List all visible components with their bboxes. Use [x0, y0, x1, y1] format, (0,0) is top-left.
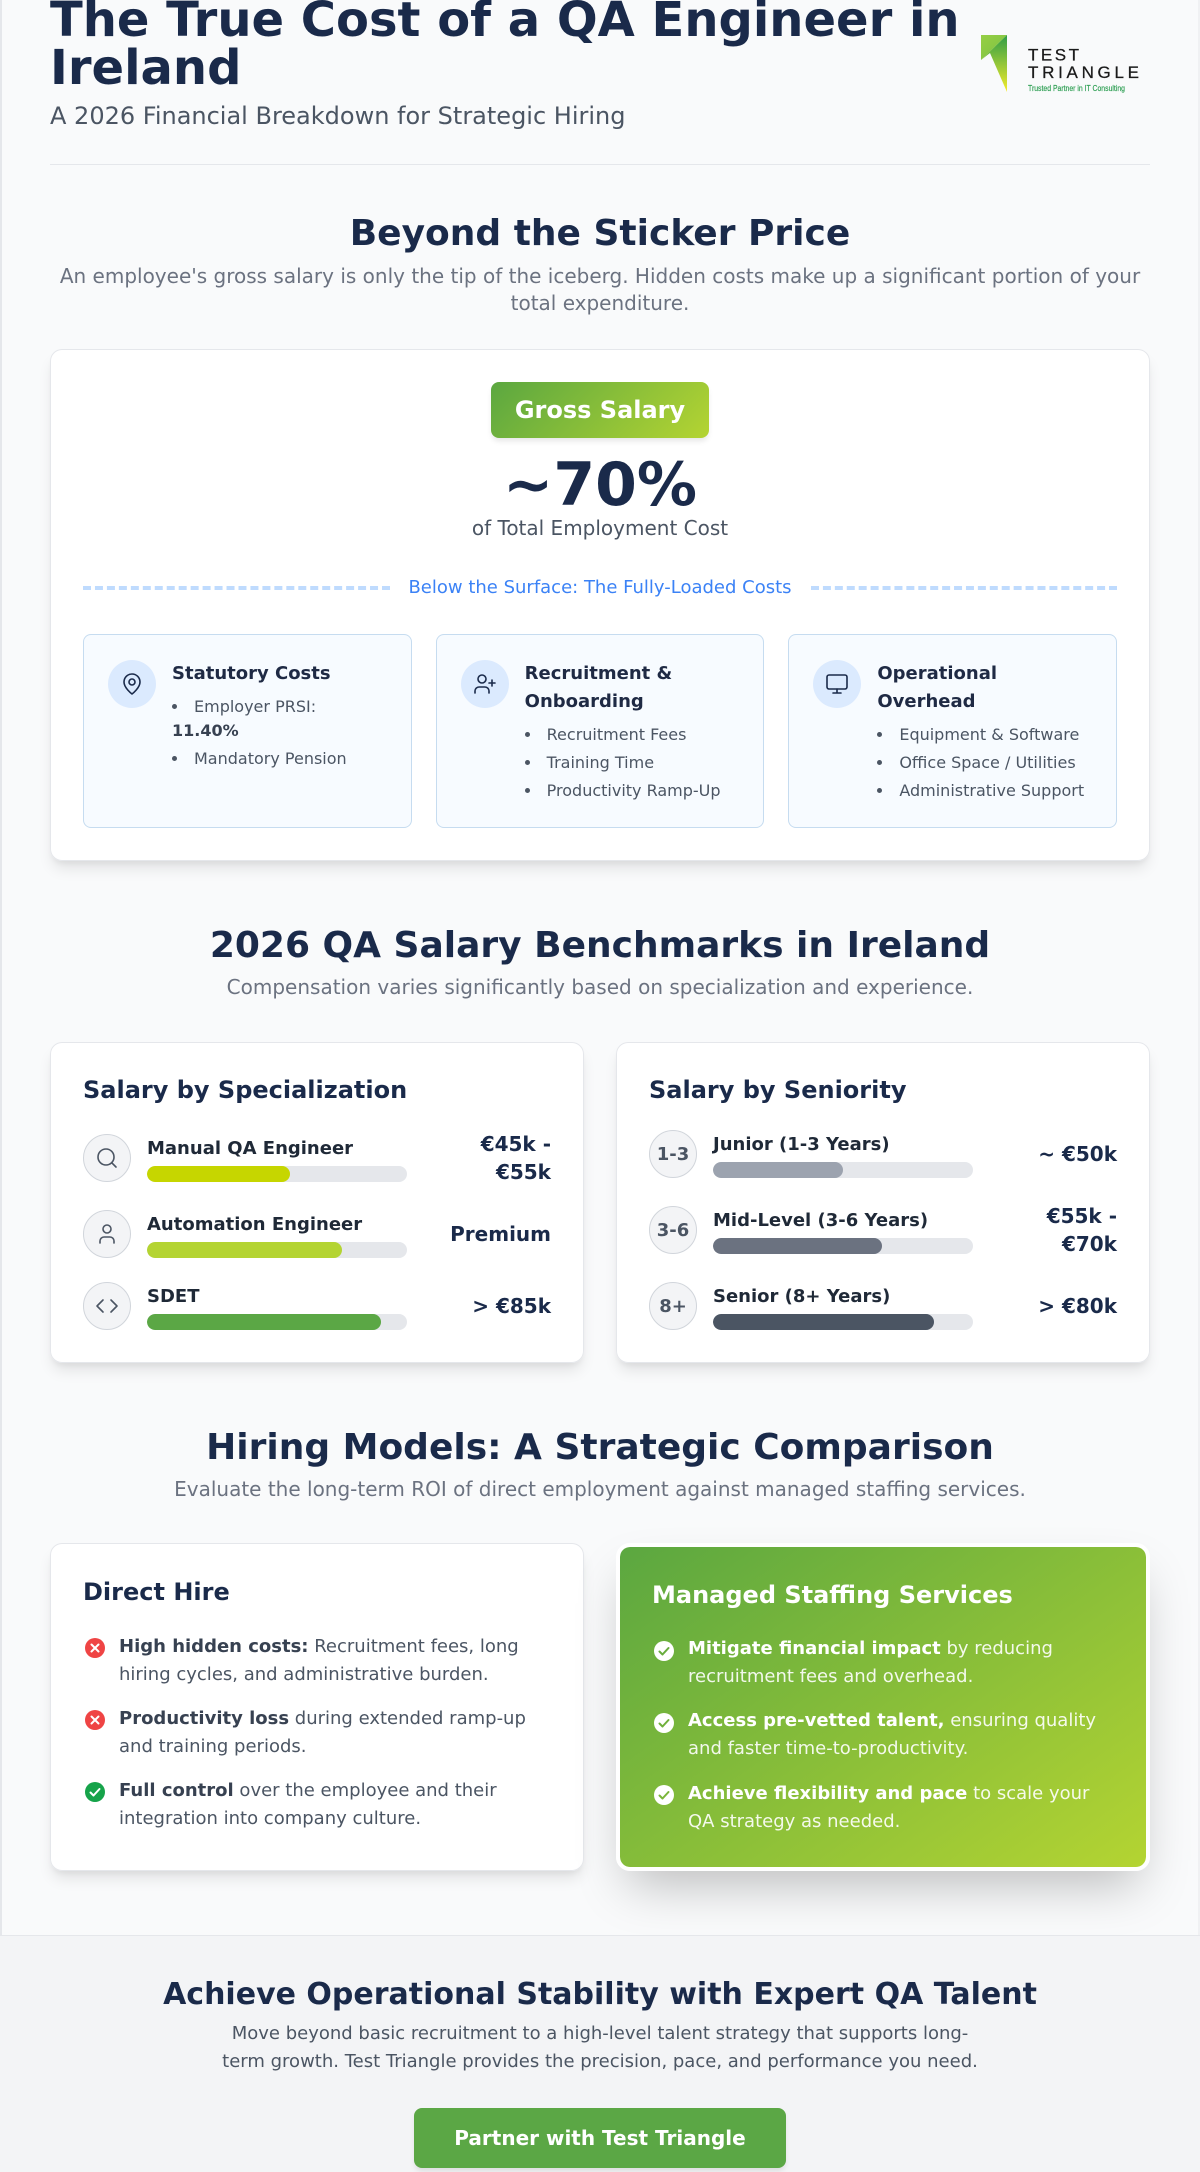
panel: direct hire: [50, 1543, 584, 1871]
label: Junior (1-3 Years): [713, 1134, 890, 1155]
section intro text: [60, 264, 1140, 315]
icon: red cross: [85, 1710, 105, 1730]
bar 65 percent: [713, 1238, 973, 1254]
value: [1046, 1204, 1118, 1256]
logo: Test Triangle: Trusted Partner in IT Consulting: [1028, 84, 1125, 93]
panel title: Salary by Specialization: [83, 1076, 407, 1104]
cost list: [877, 725, 1084, 800]
point: pre-vetted talent: Access pre-vetted talent, ensuring quality: [688, 1710, 1096, 1731]
badge: 8+: [649, 1282, 697, 1330]
point: full control: [119, 1780, 497, 1829]
container edge strips: [0, 0, 2, 2172]
cost list: Productivity Ramp-Up: [547, 781, 721, 800]
card title: [877, 663, 997, 712]
bar 85 percent: [713, 1314, 973, 1330]
point: productivity loss: Productivity loss during extended ramp-up: [119, 1708, 526, 1729]
row: automation engineer: [83, 1210, 551, 1258]
heading: hiring models: Hiring Models: A Strategic Comparison: [206, 1427, 994, 1468]
cost list: Training Time: [547, 753, 654, 772]
icon: map pin: [108, 660, 156, 708]
point: flexibility: QA strategy as needed.: [688, 1811, 900, 1832]
cost list: Employer PRSI: 11.40%: [172, 697, 316, 740]
label: SDET: [147, 1286, 199, 1307]
badge: gross salary: [491, 382, 709, 438]
logo: Test Triangle: [981, 35, 1139, 93]
point: hidden costs: High hidden costs: Recruitment fees, long: [119, 1636, 519, 1657]
row: manual QA engineer: [83, 1132, 552, 1184]
panel: salary by specialization: [50, 1042, 584, 1363]
divider label: below the surface: Below the Surface: The Fully-Loaded Costs: [408, 577, 792, 598]
panel title: Direct Hire: [83, 1578, 230, 1606]
icon: user plus: [461, 660, 509, 708]
logo: Test Triangle: TEST: [1028, 46, 1079, 64]
cost list: Office Space / Utilities: [899, 753, 1076, 772]
icon: search: [83, 1134, 131, 1182]
badge: 3-6: [649, 1206, 697, 1254]
value: Premium: [450, 1222, 551, 1246]
point: financial impact: [688, 1638, 1053, 1687]
panel: iceberg cost breakdown: [50, 349, 1150, 861]
icon: white check: [654, 1713, 674, 1733]
point: financial impact: recruitment fees and overhead.: [688, 1666, 973, 1687]
stat caption: of Total Employment Cost: [472, 516, 728, 540]
button: partner: Partner with Test Triangle: [454, 2126, 746, 2150]
panel title: Managed Staffing Services: [652, 1581, 1013, 1609]
footer text: Move beyond basic recruitment to a high-level talent strategy that supports long-: [232, 2023, 968, 2044]
label: Automation Engineer: [147, 1214, 362, 1235]
label: Mid-Level (3-6 Years): [713, 1210, 928, 1231]
label: Manual QA Engineer: [147, 1138, 353, 1159]
point: full control: Full control over the employee and their: [119, 1780, 497, 1801]
value: €55k -: [1047, 1204, 1117, 1228]
bar 75 percent: [147, 1242, 407, 1258]
button: partner: [414, 2108, 786, 2168]
section intro text: An employee's gross salary is only the tip of the iceberg. Hidden costs make up a significant portion of your: [60, 264, 1140, 288]
icon: red cross: [85, 1638, 105, 1658]
badge: 1-3: 1-3: [657, 1144, 689, 1164]
subtitle: A 2026 Financial Breakdown for Strategic Hiring: [50, 102, 625, 130]
row: SDET: [83, 1282, 552, 1330]
cost list: Equipment & Software: [899, 725, 1079, 744]
icon: user: [83, 1210, 131, 1258]
panel: statutory costs: [83, 634, 412, 828]
title: Ireland: [50, 40, 241, 96]
point: productivity loss: [119, 1708, 526, 1757]
card title: [525, 663, 672, 712]
panel: salary by seniority: [616, 1042, 1150, 1363]
heading: Beyond the Sticker Price: Beyond the Sticker Price: [350, 213, 850, 254]
value: > €80k: [1038, 1294, 1117, 1318]
point: flexibility: Achieve flexibility and pace to scale your: [688, 1783, 1089, 1804]
cost list: Recruitment Fees: [547, 725, 686, 744]
value: €55k: [496, 1160, 551, 1184]
icon: monitor: [813, 660, 861, 708]
section intro text: Compensation varies significantly based on specialization and experience.: [227, 975, 973, 999]
point: pre-vetted talent: [688, 1710, 1096, 1759]
point: pre-vetted talent: and faster time-to-productivity.: [688, 1738, 968, 1759]
icon: green check: [85, 1782, 105, 1802]
row: senior: [649, 1282, 1118, 1330]
section intro text: total expenditure.: [511, 291, 689, 315]
bar 55 percent: [147, 1166, 407, 1182]
card title: Onboarding: [525, 691, 644, 712]
value: €70k: [1062, 1232, 1117, 1256]
divider label: below the surface: [83, 577, 1117, 598]
footer heading: Achieve Operational Stability with Expert QA Talent: [163, 1977, 1037, 2012]
icon: white check: [654, 1641, 674, 1661]
section intro text: Evaluate the long-term ROI of direct employment against managed staffing services.: [174, 1477, 1026, 1501]
cost list: Mandatory Pension: [194, 749, 347, 768]
card title: Statutory Costs: [172, 663, 331, 684]
label: Senior (8+ Years): [713, 1286, 890, 1307]
point: financial impact: Mitigate financial impact by reducing: [688, 1638, 1053, 1659]
cost list: [172, 697, 347, 768]
footer call to action: [0, 1935, 1200, 2172]
point: full control: integration into company culture.: [119, 1808, 421, 1829]
panel: managed staffing services: [616, 1543, 1150, 1871]
heading: salary benchmarks: 2026 QA Salary Benchmarks in Ireland: [210, 925, 990, 966]
bar 90 percent: [147, 1314, 407, 1330]
value: [480, 1132, 552, 1184]
panel: recruitment and onboarding: [436, 634, 764, 828]
point: hidden costs: hiring cycles, and administrative burden.: [119, 1664, 489, 1685]
point: productivity loss: and training periods.: [119, 1736, 306, 1757]
icon: white check: [654, 1785, 674, 1805]
footer text: term growth. Test Triangle provides the precision, pace, and performance you need.: [222, 2051, 978, 2072]
cost list: Administrative Support: [899, 781, 1084, 800]
badge: 1-3: [649, 1130, 697, 1178]
panel title: Salary by Seniority: [649, 1076, 906, 1104]
logo: Test Triangle: TRIANGLE: [1028, 63, 1139, 82]
row: junior: [649, 1130, 1118, 1178]
card title: Overhead: [877, 691, 976, 712]
cost list: [525, 725, 721, 800]
footer text: [222, 2023, 978, 2072]
value: €45k -: [481, 1132, 551, 1156]
title: [50, 0, 960, 96]
value: > €85k: [472, 1294, 551, 1318]
badge: 3-6: 3-6: [657, 1220, 689, 1240]
value: ~ €50k: [1038, 1142, 1117, 1166]
panel: operational overhead: [788, 634, 1117, 828]
stat: 70 percent: ~70%: [503, 450, 697, 520]
row: mid-level: [649, 1204, 1118, 1256]
card title: Recruitment &: [525, 663, 672, 684]
badge: 8+: 8+: [659, 1296, 687, 1316]
point: flexibility: [688, 1783, 1090, 1832]
badge: gross salary: Gross Salary: [515, 396, 685, 424]
bar 50 percent: [713, 1162, 973, 1178]
header: [50, 0, 1139, 130]
point: hidden costs: [119, 1636, 519, 1685]
card title: Operational: [877, 663, 997, 684]
icon: code: [83, 1282, 131, 1330]
